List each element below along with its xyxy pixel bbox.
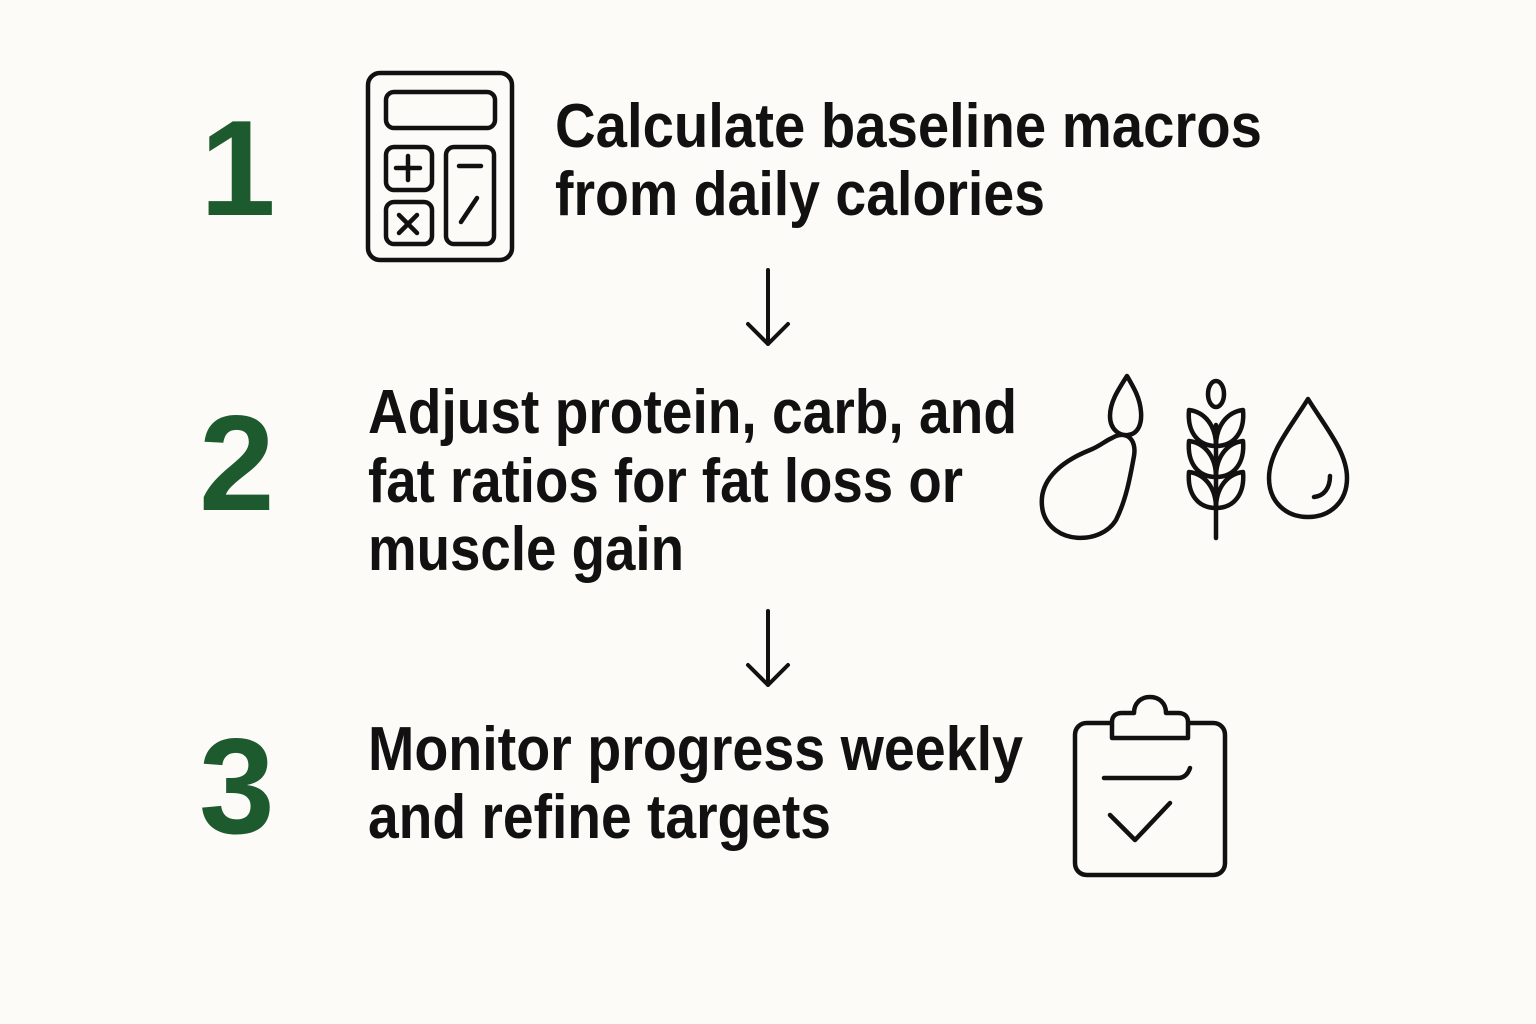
icon: calculator bbox=[368, 73, 512, 260]
text 1: Calculate baseline macros bbox=[555, 92, 1262, 161]
step 2 bbox=[199, 376, 1347, 584]
arrow 1 bbox=[748, 270, 788, 344]
number 2: 2 bbox=[199, 387, 275, 539]
arrow 2 bbox=[748, 611, 788, 685]
icon: pear bbox=[1042, 376, 1141, 538]
icon: drop bbox=[1269, 399, 1347, 517]
text 1: from daily calories bbox=[555, 160, 1045, 229]
number 1: 1 bbox=[200, 92, 276, 244]
icon: wheat bbox=[1189, 381, 1243, 538]
text 2: fat ratios for fat loss or bbox=[368, 447, 963, 516]
text 2: muscle gain bbox=[368, 515, 684, 584]
icon: clipboard bbox=[1075, 697, 1225, 875]
step 1 bbox=[200, 73, 1262, 260]
text 3: Monitor progress weekly bbox=[368, 715, 1023, 784]
step 3 bbox=[199, 697, 1225, 875]
text 2: Adjust protein, carb, and bbox=[368, 378, 1017, 447]
number 3: 3 bbox=[199, 710, 275, 862]
text 3: and refine targets bbox=[368, 783, 831, 852]
